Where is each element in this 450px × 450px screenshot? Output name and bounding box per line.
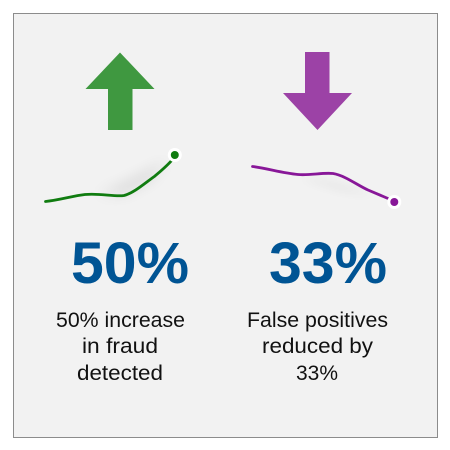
text block: false positives caption: 33% — [296, 362, 338, 385]
icon: green up arrow — [86, 52, 154, 130]
text block: fraud caption: 50% increase — [56, 309, 185, 332]
text block: false positives caption — [247, 309, 388, 385]
text block: fraud caption: in fraud — [82, 335, 158, 358]
icon: purple down arrow — [283, 52, 352, 130]
text block: false positives caption: reduced by — [262, 335, 374, 358]
statistic: 50%: 50% — [71, 231, 189, 296]
text block: fraud caption: detected — [77, 362, 163, 385]
line chart: rising green trend — [46, 148, 182, 202]
line chart: falling purple trend — [252, 166, 401, 209]
text block: fraud caption — [56, 309, 185, 385]
text block: false positives caption: False positives — [247, 309, 388, 332]
statistic: 33%: 33% — [269, 231, 387, 296]
